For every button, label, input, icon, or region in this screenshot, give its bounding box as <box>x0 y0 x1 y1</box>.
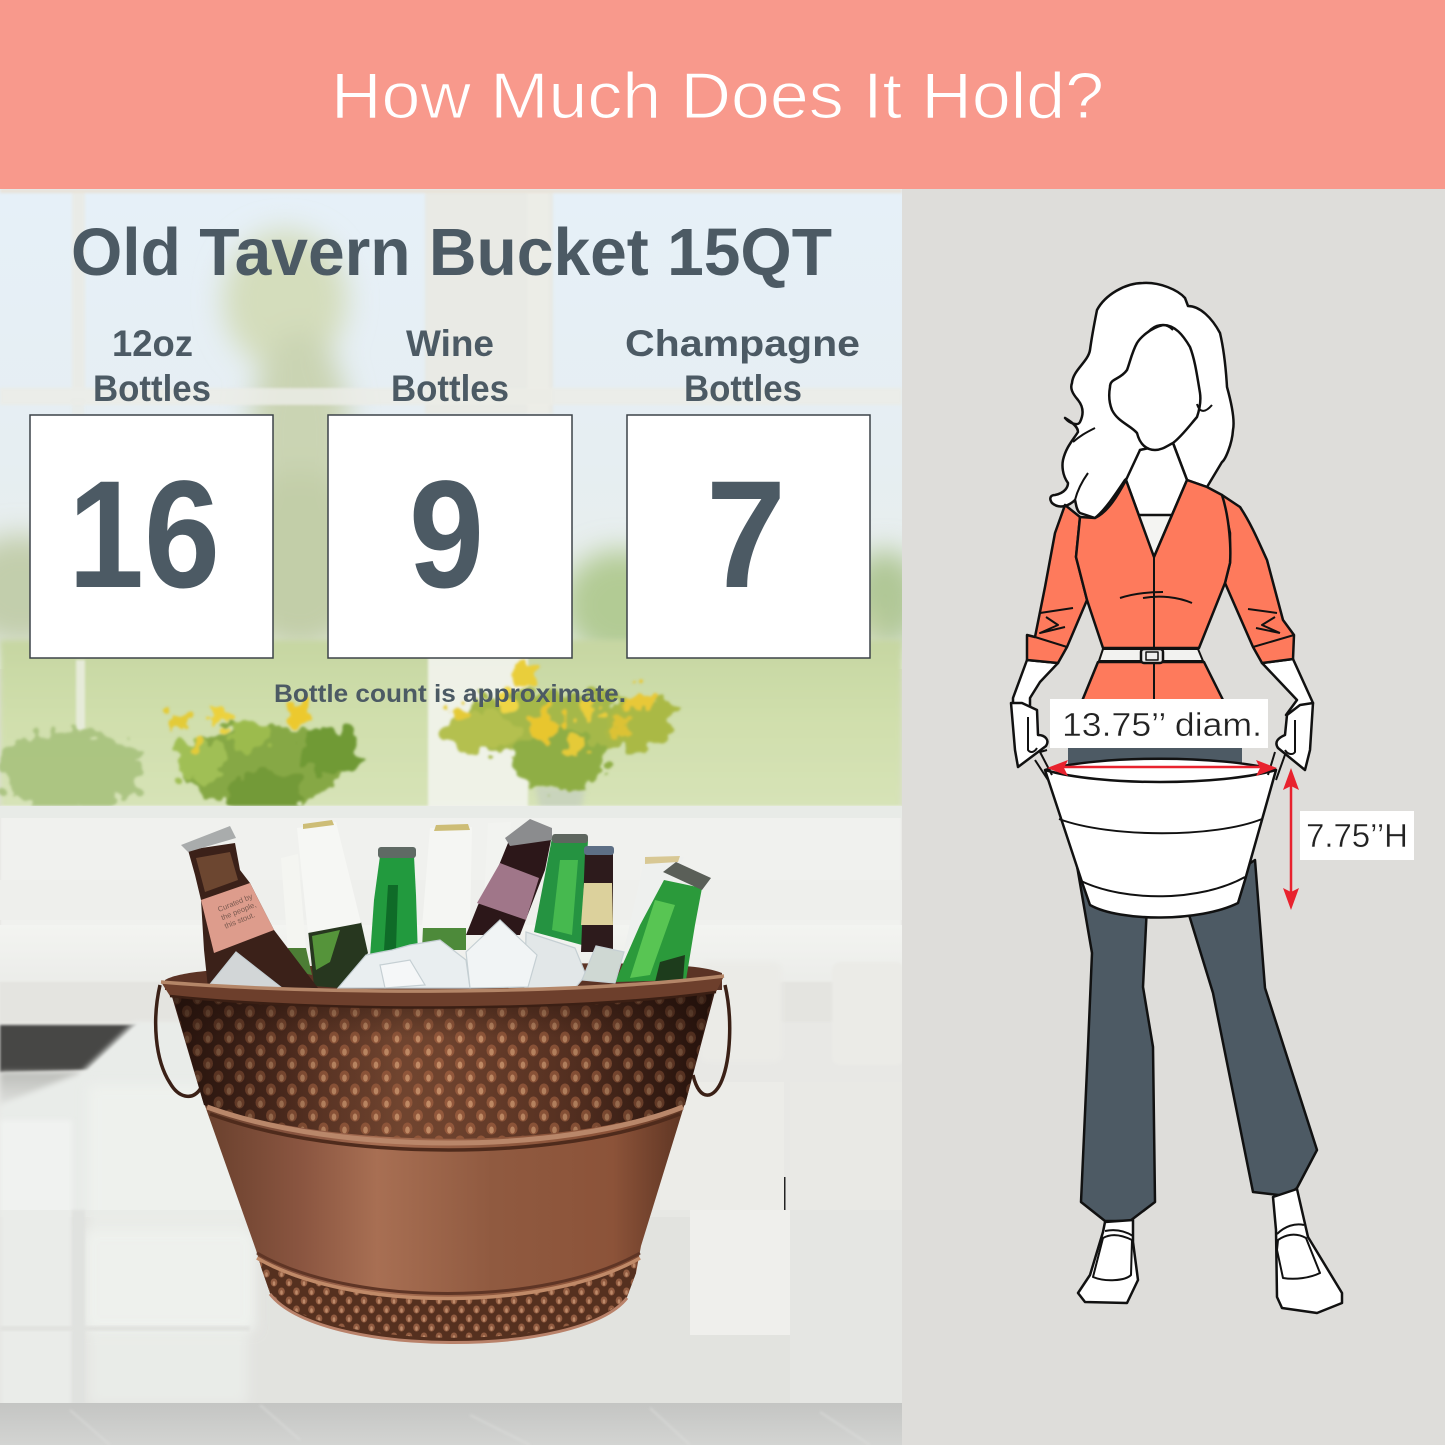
dark bottle <box>466 835 552 935</box>
green bottle <box>370 856 418 957</box>
ice <box>207 920 624 988</box>
hair <box>1050 283 1234 518</box>
bucket lower body <box>204 1103 685 1342</box>
right trouser leg <box>1186 860 1317 1196</box>
column label: champagne bottles: Champagne <box>625 323 860 364</box>
bucket with bottles <box>156 819 730 1343</box>
tilted green bottle <box>615 880 702 982</box>
column label: 12oz bottles: 12oz <box>112 323 193 364</box>
bucket bands <box>257 1253 640 1294</box>
text on bottle label: Curated by <box>216 892 254 914</box>
left hand <box>1011 703 1052 780</box>
heading: product name: Old Tavern Bucket 15QT <box>71 215 832 290</box>
count box: wine bottles: 9 <box>409 449 484 620</box>
left shoe <box>1078 1220 1138 1303</box>
cabinet panels <box>832 962 904 1065</box>
right hand <box>1268 703 1313 780</box>
white bucket <box>1045 759 1276 918</box>
peplum <box>1080 662 1226 706</box>
text on bottle label: this stout. <box>223 910 256 931</box>
left wrist <box>1013 660 1058 720</box>
right shoe <box>1273 1189 1342 1313</box>
trousers behind bucket <box>1068 748 1242 768</box>
count box: wine bottles <box>328 415 572 658</box>
right sleeve <box>1222 495 1294 663</box>
label: diameter: 13.75’’ diam. <box>1062 707 1262 744</box>
handles <box>156 985 201 1096</box>
window frames <box>0 189 902 815</box>
foil bottle with green base <box>308 922 368 988</box>
rim <box>161 976 724 1008</box>
hedge <box>0 730 144 810</box>
text on bottle label: the people, <box>220 900 258 922</box>
bucket upper hammered section <box>170 988 716 1139</box>
sink and counter <box>0 806 902 931</box>
flowers right <box>537 787 583 806</box>
blouse torso <box>1076 480 1230 648</box>
belt <box>1099 649 1203 661</box>
title: How Much Does It Hold? <box>331 59 1104 132</box>
count box: champagne bottles <box>627 415 870 658</box>
note: approximate count: Bottle count is approximate. <box>274 680 626 708</box>
back rim <box>165 963 722 990</box>
dark bottle with gold label <box>581 853 613 952</box>
label: height <box>1300 811 1414 860</box>
neck <box>1126 443 1187 557</box>
right wrist <box>1262 659 1313 720</box>
count box: champagne bottles: 7 <box>706 449 786 620</box>
count box: 12oz bottles <box>30 415 273 658</box>
marble ledge <box>0 1403 902 1445</box>
column label: wine bottles: Wine <box>406 323 494 364</box>
brown bottle <box>188 843 318 988</box>
counter reflections <box>7 1023 138 1106</box>
shirt neckline <box>1137 515 1172 557</box>
left sleeve <box>1027 505 1087 663</box>
panel: kitchen photo background <box>0 189 923 1445</box>
bucket bottom hammered band <box>259 1260 636 1342</box>
panel: grey figure background <box>902 189 1445 1445</box>
woman figure illustration <box>1011 283 1342 1313</box>
arrow: height <box>1283 768 1299 910</box>
arrow: diameter <box>1047 760 1277 776</box>
count box: 12oz bottles: 16 <box>68 449 220 620</box>
label: diameter <box>1050 699 1268 748</box>
header band <box>0 0 1445 189</box>
face <box>1109 325 1200 450</box>
bottles <box>181 819 711 988</box>
column label: 12oz bottles: Bottles <box>93 368 211 409</box>
column label: wine bottles: Bottles <box>391 368 509 409</box>
green bottle right <box>534 838 588 945</box>
column label: champagne bottles: Bottles <box>684 368 802 409</box>
foil bottle centre <box>422 927 466 950</box>
back foil bottles <box>281 854 306 950</box>
flowers left <box>168 703 358 830</box>
sink opening <box>0 1025 137 1072</box>
left trouser leg <box>1076 860 1155 1221</box>
label: height: 7.75’’H <box>1306 818 1408 855</box>
